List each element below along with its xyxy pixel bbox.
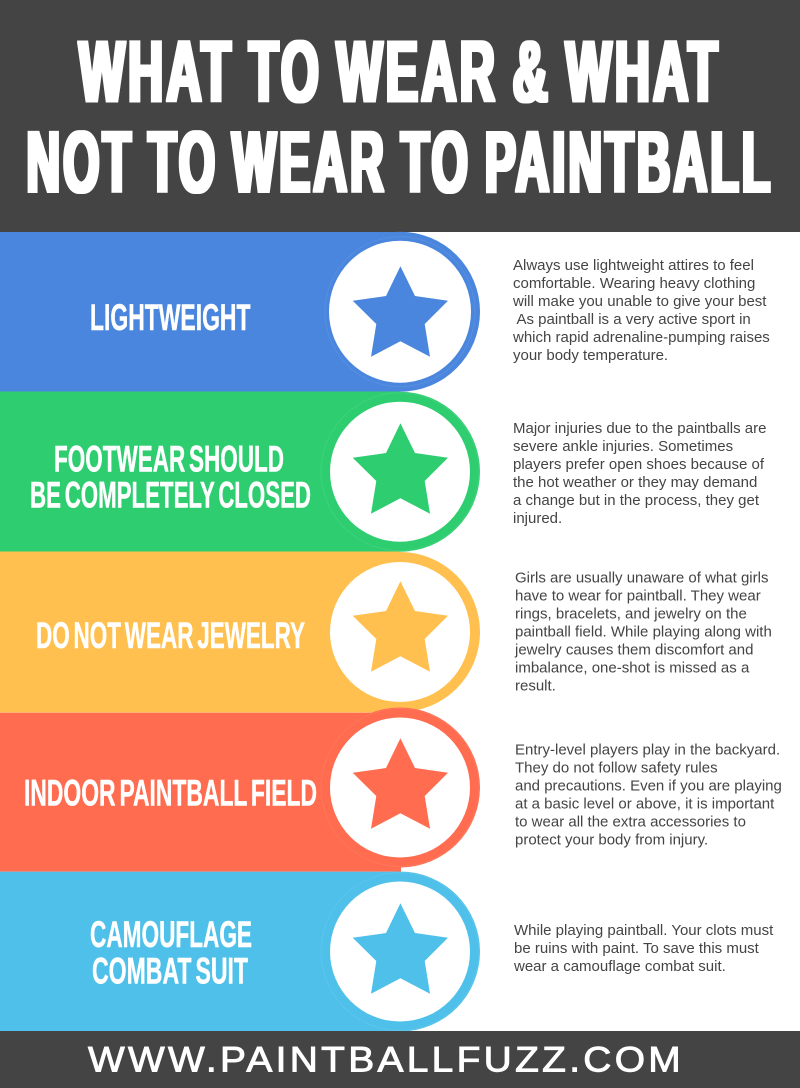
text block: camouflage: be ruins with paint. To save this must: [514, 940, 760, 957]
text block: jewelry: rings, bracelets, and jewelry on the: [515, 606, 747, 623]
text block: footwear: Major injuries due to the paintballs are: [513, 420, 766, 437]
text block: indoor field: and precautions. Even if you are playing: [515, 777, 782, 794]
icon: green star badge: [320, 392, 480, 552]
footer url: WWW.PAINTBALLFUZZ.COM: [88, 1039, 684, 1079]
text block: lightweight: comfortable. Wearing heavy clothing: [513, 275, 755, 292]
text block: indoor field: Entry-level players play in the backyard.: [515, 741, 780, 758]
text block: indoor field: to wear all the extra accessories to: [515, 813, 746, 830]
heading: camouflage: COMBAT SUIT: [92, 949, 248, 991]
text block: lightweight: will make you unable to give your best: [512, 293, 767, 310]
panel: lightweight: [0, 232, 770, 392]
icon: yellow star badge: [320, 552, 480, 712]
panel: camouflage: [0, 872, 774, 1032]
text block: lightweight: [512, 257, 770, 364]
text block: jewelry: have to wear for paintball. They wear: [515, 588, 761, 605]
text block: indoor field: protect your body from injury.: [515, 831, 708, 848]
icon: cyan star badge: [320, 872, 480, 1032]
panel: footwear: [0, 392, 766, 552]
icon: blue star badge: [320, 232, 480, 392]
heading: camouflage: CAMOUFLAGE: [90, 913, 252, 955]
text block: jewelry: jewelry causes them discomfort and: [514, 642, 753, 659]
header: [0, 0, 800, 232]
text block: footwear: players prefer open shoes because of: [513, 456, 765, 473]
title: [26, 24, 774, 211]
panel: jewelry: [0, 552, 772, 712]
panel: indoor field: [0, 708, 782, 872]
text block: jewelry: paintball field. While playing along with: [515, 624, 772, 641]
text block: footwear: the hot weather or they may demand: [513, 474, 757, 491]
text block: camouflage: While playing paintball. Your clots must: [514, 922, 774, 939]
text block: indoor field: at a basic level or above, it is important: [515, 795, 775, 812]
heading: footwear: BE COMPLETELY CLOSED: [30, 474, 311, 516]
text block: indoor field: [515, 741, 782, 848]
heading: footwear: FOOTWEAR SHOULD: [54, 438, 284, 480]
heading: lightweight: LIGHTWEIGHT: [90, 296, 251, 338]
heading: footwear: [30, 438, 311, 516]
text block: footwear: [513, 420, 766, 527]
heading: camouflage: [90, 913, 252, 991]
footer: [0, 1031, 800, 1088]
icon: red star badge: [320, 708, 480, 868]
heading: jewelry: DO NOT WEAR JEWELRY: [36, 614, 305, 656]
text block: lightweight: Always use lightweight attires to feel: [513, 257, 754, 274]
text block: jewelry: result.: [515, 678, 556, 695]
text block: footwear: a change but in the process, they get: [513, 492, 760, 509]
text block: lightweight: your body temperature.: [513, 347, 668, 364]
text block: jewelry: [514, 570, 772, 695]
text block: lightweight: which rapid adrenaline-pumping raises: [512, 329, 770, 346]
text block: jewelry: imbalance, one-shot is missed as a: [515, 660, 750, 677]
text block: lightweight: As paintball is a very active sport in: [516, 311, 751, 328]
text block: footwear: injured.: [513, 510, 562, 527]
text block: jewelry: Girls are usually unaware of what girls: [515, 570, 768, 587]
text block: footwear: severe ankle injuries. Sometimes: [513, 438, 733, 455]
heading: indoor field: INDOOR PAINTBALL FIELD: [24, 772, 317, 814]
text block: camouflage: wear a camouflage combat suit.: [513, 958, 726, 975]
text block: camouflage: [513, 922, 774, 975]
text block: indoor field: They do not follow safety rules: [515, 759, 718, 776]
